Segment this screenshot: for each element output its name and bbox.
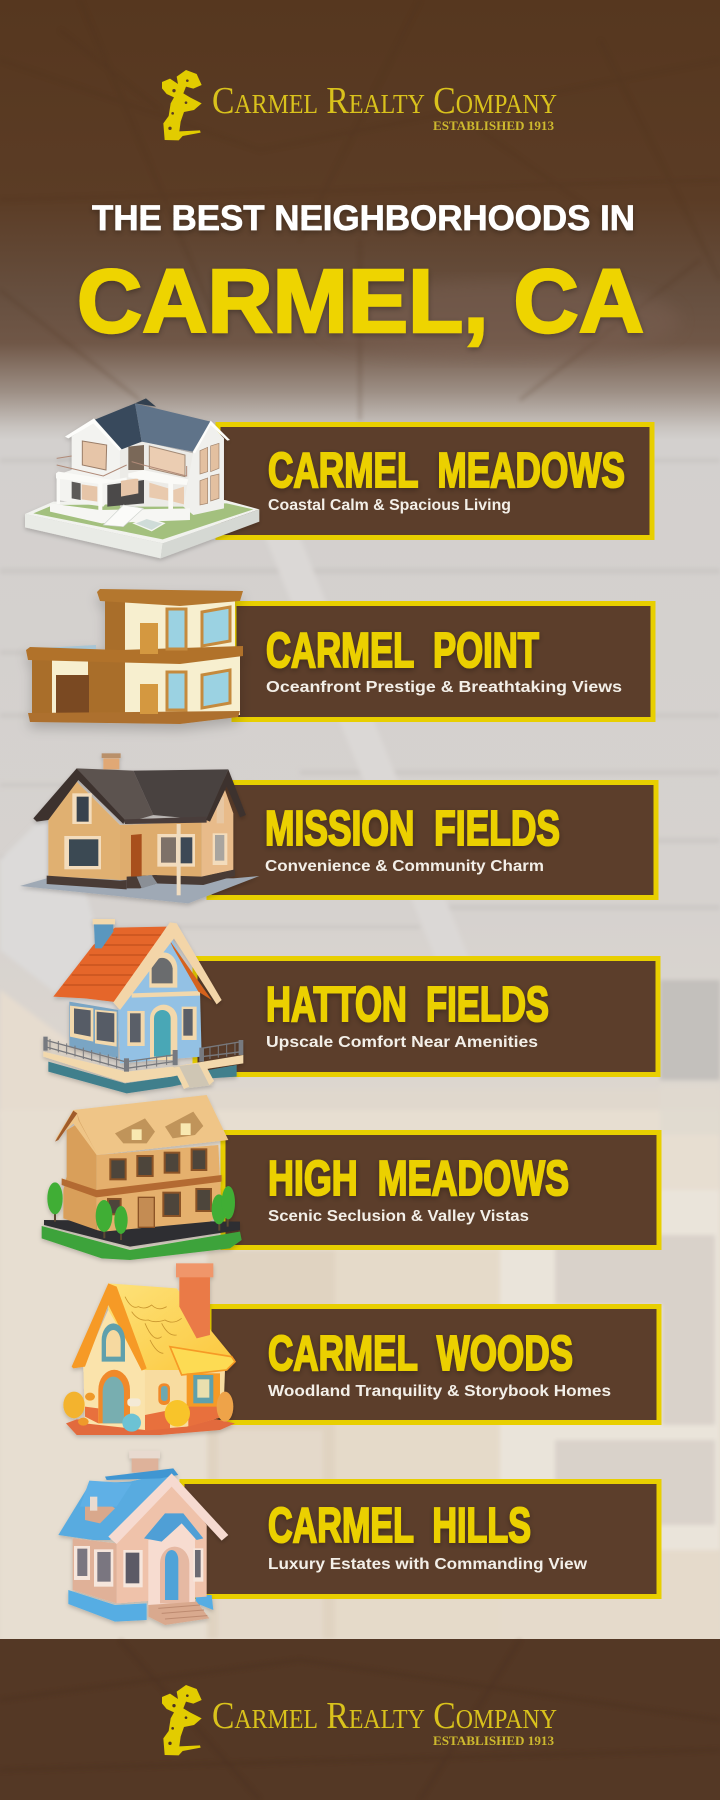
icon: white house with blue roof: [25, 398, 259, 558]
heading: HATTON FIELDS: [266, 978, 549, 1032]
text: Scenic Seclusion & Valley Vistas: [268, 1208, 529, 1225]
text: Oceanfront Prestige & Breathtaking Views: [266, 679, 622, 696]
logo: footer: [162, 1685, 557, 1755]
text: Luxury Estates with Commanding View: [268, 1556, 588, 1573]
icon: brick manor with green base: [42, 1095, 242, 1260]
icon: cypress tree: [162, 70, 202, 140]
heading: CARMEL HILLS: [268, 1499, 531, 1553]
panel: Carmel Meadows: [218, 424, 652, 538]
panel: Hatton Fields: [195, 958, 658, 1074]
background: header aerial texture: [0, 0, 720, 420]
icon: yellow storybook cottage: [63, 1263, 235, 1435]
panel: Carmel Hills: [182, 1482, 659, 1596]
heading: HIGH MEADOWS: [268, 1152, 569, 1206]
logo: header: [162, 70, 557, 140]
text: Woodland Tranquility & Storybook Homes: [268, 1383, 611, 1400]
background: door and window: [0, 1085, 720, 1640]
background: interior lines and beams: [0, 458, 720, 1120]
icon: pink cottage with blue roof: [58, 1451, 228, 1625]
icon: modern brown house: [26, 589, 243, 724]
icon: blue house with orange roof: [43, 919, 243, 1093]
panel: Mission Fields: [209, 782, 656, 898]
title line 2: CARMEL, CA: [77, 252, 644, 352]
text: Convenience & Community Charm: [265, 858, 544, 875]
title line 1: THE BEST NEIGHBORHOODS IN: [92, 199, 635, 238]
logo wordmark: CARMEL REALTY COMPANY: [212, 1695, 557, 1737]
title: [77, 199, 644, 352]
logo tagline: ESTABLISHED 1913: [433, 1733, 555, 1748]
text: Upscale Comfort Near Amenities: [266, 1034, 538, 1051]
panel: Carmel Point: [234, 604, 653, 720]
icon: cypress tree: [162, 1685, 202, 1755]
icon: tan house with dark roof: [20, 753, 259, 903]
logo tagline: ESTABLISHED 1913: [433, 118, 555, 133]
text: Coastal Calm & Spacious Living: [268, 497, 511, 514]
heading: MISSION FIELDS: [265, 802, 560, 856]
logo wordmark: CARMEL REALTY COMPANY: [212, 80, 557, 122]
panel: High Meadows: [223, 1132, 659, 1248]
heading: CARMEL POINT: [266, 624, 539, 678]
footer band: [0, 1639, 720, 1800]
panel: Carmel Woods: [209, 1306, 659, 1422]
heading: CARMEL WOODS: [268, 1327, 573, 1381]
